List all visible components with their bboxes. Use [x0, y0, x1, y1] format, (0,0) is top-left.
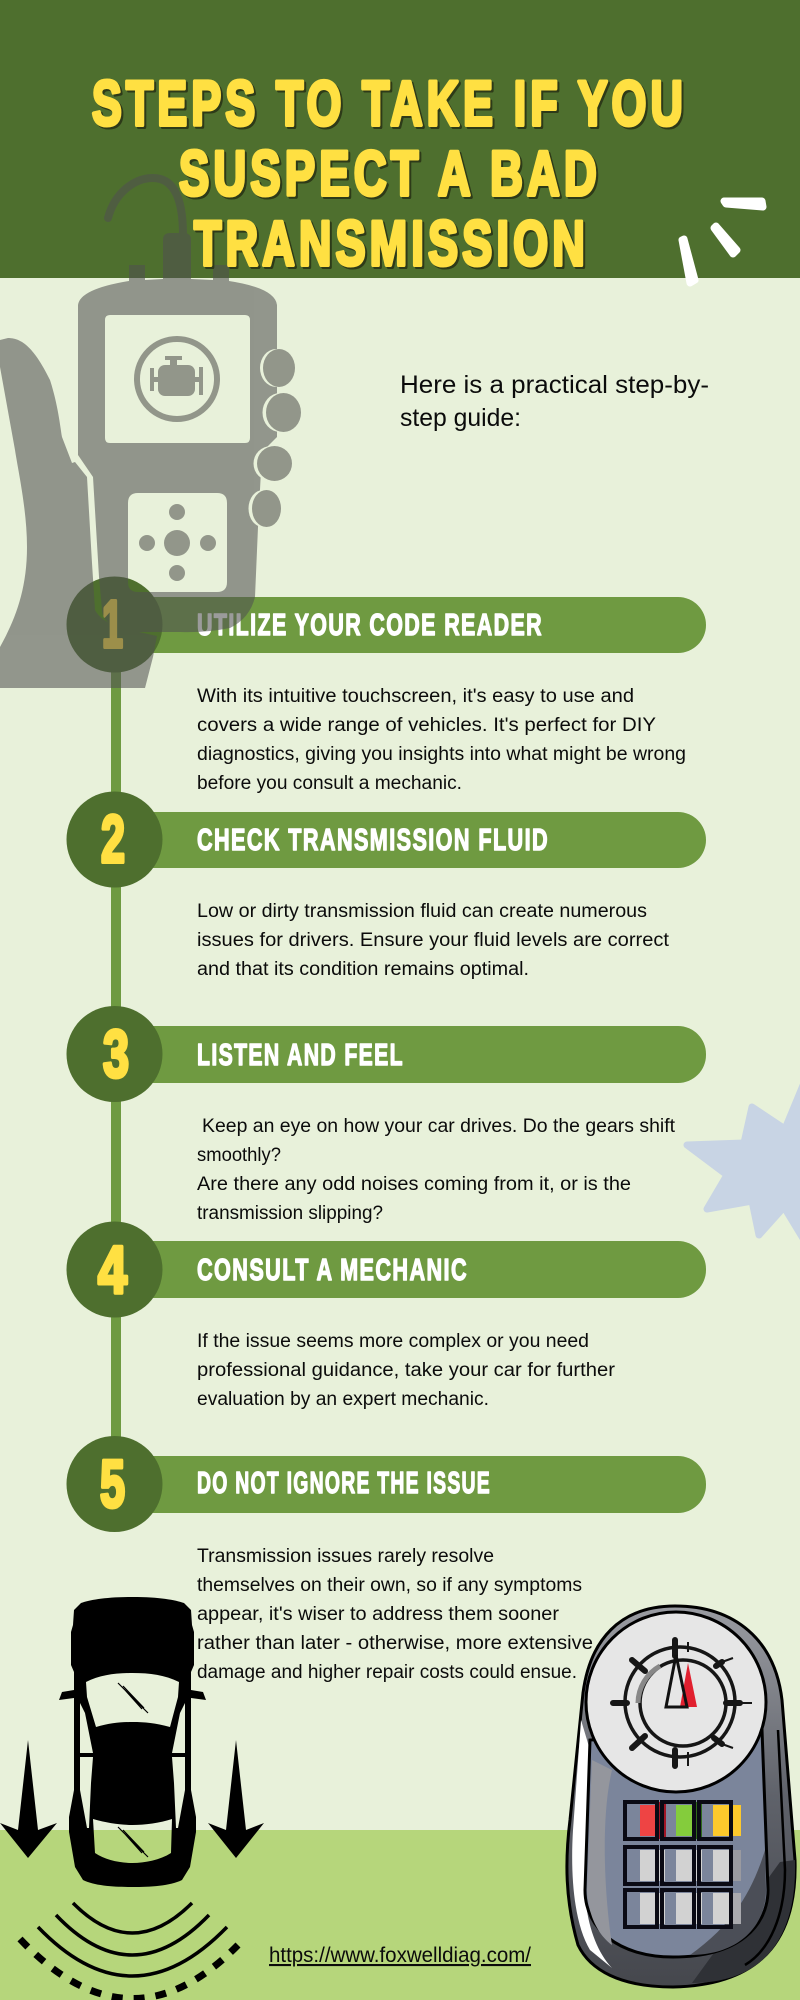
step 1 text: [197, 686, 686, 794]
scanner fingers: [248, 349, 301, 527]
panel left shading: [587, 1760, 612, 1945]
step 2 number badge: [66, 792, 162, 888]
windshield wiper lines: [118, 1683, 148, 1857]
title: [92, 69, 687, 279]
icon: code reader held in hand: [0, 178, 301, 688]
red needle: [680, 1663, 697, 1707]
step 3 number badge: [66, 1006, 162, 1102]
icon: car top view: [59, 1597, 206, 1887]
step 3 heading bar: [115, 1026, 706, 1083]
step 1 text: covers a wide range of vehicles. It's perfect for DIY: [197, 715, 656, 736]
step 2 text: [197, 901, 670, 980]
website link: https://www.foxwelldiag.com/: [269, 1944, 531, 1967]
step 5 text: damage and higher repair costs could ensue.: [197, 1662, 577, 1683]
step 1: [66, 576, 706, 794]
step 4 heading bar: [115, 1241, 706, 1298]
step 2 text: Low or dirty transmission fluid can create numerous: [197, 901, 647, 922]
step 4 text: professional guidance, take your car for further: [197, 1360, 616, 1381]
white needle: [666, 1655, 687, 1707]
step 2 text: issues for drivers. Ensure your fluid levels are correct: [197, 930, 670, 951]
gauge dial with ticks: [613, 1640, 752, 1766]
icon: engine symbol on screen: [137, 339, 217, 419]
step 4 number badge: 4: [98, 1233, 127, 1308]
scanner keypad buttons: [139, 504, 216, 581]
step 3 text: Are there any odd noises coming from it, or is the: [197, 1174, 631, 1195]
intro text: Here is a practical step-by-: [400, 371, 709, 399]
step 2 heading bar: [115, 812, 706, 868]
indicator button grid: [625, 1802, 741, 1927]
shell white highlight: [572, 1720, 612, 1968]
timeline connector: [111, 625, 121, 1485]
sensor signal arcs: [20, 1903, 238, 1999]
step 2 text: and that its condition remains optimal.: [197, 959, 529, 980]
gauge face: [586, 1612, 766, 1792]
step 4 number badge: [66, 1222, 162, 1318]
step 1 text: diagnostics, giving you insights into what might be wrong: [197, 744, 686, 765]
step 5 text: rather than later - otherwise, more extensive: [197, 1633, 593, 1654]
step 5 heading bar: [115, 1456, 706, 1513]
intro text: step guide:: [400, 404, 521, 432]
step 2: [66, 792, 706, 980]
step 1 heading bar: [115, 597, 706, 653]
intro text: [400, 371, 709, 432]
arrow: left down: [0, 1740, 57, 1858]
step 1 number badge: [66, 576, 162, 672]
icon: gauge device: [567, 1606, 795, 1987]
step 1 text: before you consult a mechanic.: [197, 773, 462, 794]
shell inner outline: [745, 1730, 785, 1965]
step 5: [66, 1436, 706, 1683]
step 2 number badge: 2: [101, 802, 125, 877]
step 1 heading: UTILIZE YOUR CODE READER: [197, 607, 543, 642]
title: SUSPECT A BAD: [179, 139, 601, 209]
decorative blue star: [687, 1083, 800, 1240]
step 3 text: smoothly?: [197, 1145, 281, 1166]
step 5 text: themselves on their own, so if any symptoms: [197, 1575, 582, 1596]
step 3 text: [197, 1116, 676, 1224]
blue-grey panel: [585, 1730, 768, 1957]
device shell: [567, 1606, 795, 1987]
step 5 text: appear, it's wiser to address them sooner: [197, 1604, 560, 1625]
step 4 text: evaluation by an expert mechanic.: [197, 1389, 489, 1410]
step 5 heading: DO NOT IGNORE THE ISSUE: [197, 1465, 491, 1500]
shell dark shading: [692, 1860, 795, 1983]
step 4 text: If the issue seems more complex or you need: [197, 1331, 589, 1352]
step 4 text: [197, 1331, 616, 1410]
arrow: right down: [208, 1740, 264, 1858]
step 3 text: transmission slipping?: [197, 1203, 383, 1224]
step 3 number badge: 3: [103, 1017, 129, 1092]
panel right shading: [690, 1850, 766, 1955]
step 3 text: Keep an eye on how your car drives. Do the gears shift: [202, 1116, 676, 1137]
step 2 heading: CHECK TRANSMISSION FLUID: [197, 822, 549, 857]
header band: [0, 0, 800, 278]
car silhouette: [59, 1597, 206, 1887]
step 3: [66, 1006, 706, 1224]
decorative white sparks: [682, 201, 763, 283]
title: TRANSMISSION: [194, 209, 589, 279]
scanner silhouette with cable and hand: [0, 178, 277, 688]
step 5 text: [197, 1546, 593, 1683]
step 1 text: With its intuitive touchscreen, it's easy to use and: [197, 686, 634, 707]
step 4 heading: CONSULT A MECHANIC: [197, 1252, 468, 1287]
step 5 number badge: [66, 1436, 162, 1532]
step 1 number badge: 1: [102, 587, 123, 662]
step 4: [66, 1222, 706, 1410]
step 5 number badge: 5: [100, 1447, 125, 1522]
step 5 text: Transmission issues rarely resolve: [197, 1546, 494, 1567]
step 3 heading: LISTEN AND FEEL: [197, 1037, 404, 1072]
footer green band: [0, 1830, 800, 2000]
